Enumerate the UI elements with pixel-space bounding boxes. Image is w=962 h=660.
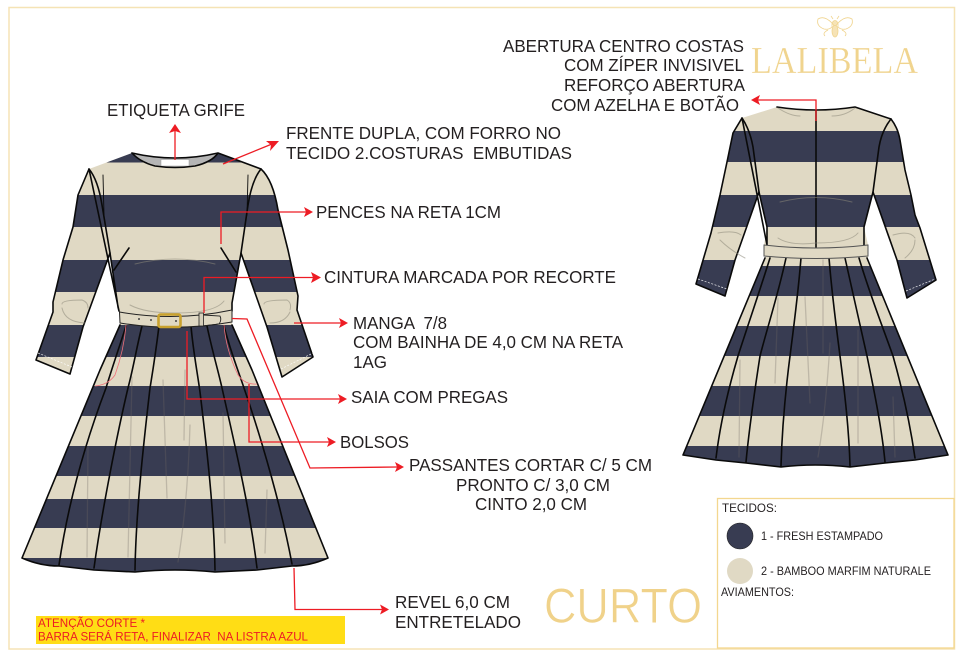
back armhole seams — [742, 118, 891, 192]
callout: passantes: PASSANTES CORTAR C/ 5 CM — [409, 455, 652, 475]
back dress fabric stripes — [684, 107, 947, 466]
back dress outline — [696, 107, 936, 298]
back zipper seam — [815, 110, 817, 249]
callout: abertura centro costas: ABERTURA CENTRO COSTAS — [503, 36, 744, 56]
panel: materials legend — [718, 498, 954, 648]
front sleeve hem stitching — [38, 353, 313, 369]
callout: cintura: CINTURA MARCADA POR RECORTE — [324, 267, 616, 287]
swatch: ivory fabric — [727, 558, 931, 584]
swatch: ivory fabric: 2 - BAMBOO MARFIM NATURALE — [761, 565, 931, 578]
callout: passantes: CINTO 2,0 CM — [475, 494, 587, 514]
callout: cintura — [204, 267, 616, 313]
front skirt pleats — [59, 326, 292, 570]
callout: revel: ENTRETELADO — [395, 612, 521, 632]
callout: abertura centro costas: COM AZELHA E BOTÃO — [551, 95, 739, 115]
callout: frente dupla: FRENTE DUPLA, COM FORRO NO — [286, 123, 561, 143]
callout: manga — [294, 313, 624, 372]
callout: frente dupla: TECIDO 2.COSTURAS EMBUTIDAS — [286, 143, 572, 163]
back dress illustration — [670, 100, 960, 470]
callout: abertura centro costas — [503, 36, 816, 121]
callout: abertura centro costas: REFORÇO ABERTURA — [564, 75, 746, 95]
belt — [120, 310, 232, 327]
callout: passantes: PRONTO C/ 3,0 CM — [456, 475, 610, 495]
callout: manga: COM BAINHA DE 4,0 CM NA RETA — [353, 332, 624, 352]
heading: tecidos: TECIDOS: — [722, 502, 777, 515]
belt holes — [138, 318, 140, 320]
callout: bolsos — [249, 384, 409, 452]
attention note — [36, 616, 345, 644]
icon: bee — [818, 16, 852, 37]
back belt — [764, 245, 868, 258]
front skirt hem and sides — [22, 325, 328, 572]
callout: revel — [294, 568, 521, 632]
front dress illustration — [21, 152, 329, 573]
belt buckle — [158, 314, 180, 327]
belt loop — [199, 313, 204, 326]
back skirt pleats — [716, 258, 915, 466]
front armhole and dart seams — [89, 169, 261, 253]
back fold shading — [718, 108, 915, 258]
callout: frente dupla — [223, 123, 572, 164]
curto label: CURTO — [544, 580, 702, 634]
callout: bolsos: BOLSOS — [340, 432, 409, 452]
callout: saia com pregas — [187, 331, 508, 407]
attention note: BARRA SERÁ RETA, FINALIZAR NA LISTRA AZUL — [38, 628, 308, 644]
callout: manga: MANGA 7/8 — [353, 313, 447, 333]
callout: etiqueta grife — [107, 100, 245, 160]
callout: revel: REVEL 6,0 CM — [395, 592, 510, 612]
front dress outline — [36, 153, 313, 377]
pocket seams — [95, 325, 257, 386]
logo: lalibela — [751, 16, 918, 82]
back sleeve hem stitching — [698, 279, 935, 291]
callout: pences — [221, 202, 501, 244]
logo: lalibela: LALIBELA — [751, 40, 918, 82]
callout: manga: 1AG — [353, 352, 387, 372]
swatch: navy fabric: 1 - FRESH ESTAMPADO — [761, 530, 883, 543]
callout: abertura centro costas: COM ZÍPER INVISIVEL — [564, 55, 744, 75]
front neckline lining — [132, 153, 218, 167]
front dress fabric stripes — [23, 153, 327, 572]
back skirt hem and sides — [683, 258, 948, 467]
callout: passantes — [232, 318, 652, 514]
callout: etiqueta grife: ETIQUETA GRIFE — [107, 100, 245, 120]
attention note: ATENÇÃO CORTE * — [38, 616, 145, 630]
heading: aviamentos: AVIAMENTOS: — [721, 586, 794, 599]
front fold shading — [62, 259, 291, 323]
callout: saia com pregas: SAIA COM PREGAS — [351, 387, 508, 407]
callout: pences: PENCES NA RETA 1CM — [316, 202, 501, 222]
neck label — [161, 160, 189, 166]
swatch: navy fabric — [727, 523, 883, 549]
